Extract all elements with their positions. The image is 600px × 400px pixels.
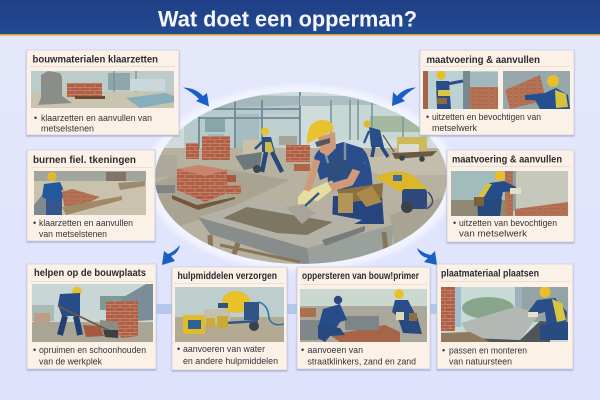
- panel: helpen op de bouwplaats: [27, 264, 156, 369]
- compressor: [384, 184, 402, 201]
- illustration: two workers at wall: [423, 70, 570, 109]
- panel: bouwmaterialen klaarzetten: metselstenen: [41, 124, 94, 134]
- panel: plaatmateriaal plaatsen: van natuursteen: [449, 356, 512, 366]
- panel: oppersteren van bouw!primer: straatklinkers, zand en zand: [308, 356, 416, 366]
- panel: bouwmaterialen klaarzetten: klaarzetten en aanvullen van: [41, 113, 152, 123]
- panel: burnen fiel. tkeningen: [27, 150, 155, 241]
- bullet text: •: [442, 346, 445, 356]
- heading: bouwmaterialen klaarzetten: [32, 54, 158, 66]
- panel: maatvoering & aanvullen (middle): uitzetten van bevochtigen: [459, 218, 557, 228]
- heading: hulpmiddelen verzorgen: [178, 271, 277, 282]
- illustration: worker at wall panel: [451, 171, 568, 216]
- panel: hulpmiddelen verzorgen: [172, 267, 287, 370]
- panel: maatvoering & aanvullen (top): uitzetten en bevochtigen van: [432, 112, 541, 122]
- bullet text: •: [34, 113, 37, 123]
- illustration: paving workers: [300, 289, 427, 342]
- panel: plaatmateriaal plaatsen: passen en monteren: [449, 346, 527, 356]
- bullet text: •: [301, 345, 304, 355]
- arrow: bottom right: [417, 248, 437, 265]
- brick pallet: [177, 165, 227, 176]
- central oval illustration: [146, 85, 456, 271]
- arrow: top left: [183, 88, 209, 106]
- panel: plaatmateriaal plaatsen: [437, 264, 573, 369]
- bullet text: •: [426, 112, 429, 122]
- main worker: [298, 120, 384, 224]
- panel: helpen op de bouwplaats: opruimen en schoonhouden: [39, 345, 146, 355]
- panel: hulpmiddelen verzorgen: aanvoeren van water: [183, 344, 265, 354]
- bullet text: •: [453, 218, 456, 228]
- panel: maatvoering & aanvullen (middle): [447, 150, 574, 242]
- heading: plaatmateriaal plaatsen: [441, 268, 539, 280]
- arrow: bottom left: [162, 245, 180, 265]
- bullet text: •: [177, 344, 180, 354]
- illustration: worker with pallet: [34, 171, 146, 215]
- panel: oppersteren van bouw!primer: [297, 267, 430, 369]
- panel: burnen fiel. tkeningen: klaarzetten en aanvullen: [39, 218, 133, 228]
- ground shading: [156, 165, 290, 226]
- heading: oppersteren van bouw!primer: [302, 271, 419, 282]
- illustration: materials: [31, 71, 174, 108]
- panel: helpen op de bouwplaats: van de werkplek: [39, 356, 102, 366]
- cart: [397, 137, 427, 150]
- panel: hulpmiddelen verzorgen: en andere hulpmiddelen: [183, 356, 278, 366]
- background bricks: [186, 143, 199, 159]
- panel: maatvoering & aanvullen (top): [420, 50, 574, 135]
- wheelbarrow: [235, 152, 262, 170]
- illustration: mixer and bucket: [175, 287, 284, 342]
- bullet text: •: [33, 345, 36, 355]
- background building: [184, 103, 301, 149]
- table with mortar: [198, 217, 310, 266]
- background worker left: [255, 128, 282, 172]
- illustration: worker shovelling: [32, 284, 153, 342]
- panel: maatvoering & aanvullen (middle): van metselwerk: [459, 228, 528, 238]
- heading: helpen op de bouwplaats: [34, 268, 146, 279]
- heading: maatvoering & aanvullen: [426, 55, 540, 66]
- panel: bouwmaterialen klaarzetten: [26, 50, 179, 135]
- connector bars: [150, 304, 450, 314]
- title: Wat doet een opperman?: [158, 6, 417, 32]
- background worker right: [363, 120, 394, 157]
- panel: maatvoering & aanvullen (top): metselwerk: [432, 123, 477, 133]
- arrow: top right: [392, 88, 416, 106]
- header banner: [0, 0, 600, 36]
- panel: burnen fiel. tkeningen: van metselstenen: [39, 229, 107, 239]
- heading: burnen fiel. tkeningen: [33, 155, 136, 166]
- panel: oppersteren van bouw!primer: aanvoeen van: [308, 345, 363, 355]
- heading: maatvoering & aanvullen: [452, 154, 562, 166]
- illustration: window sill: [441, 286, 568, 342]
- bullet text: •: [33, 218, 36, 228]
